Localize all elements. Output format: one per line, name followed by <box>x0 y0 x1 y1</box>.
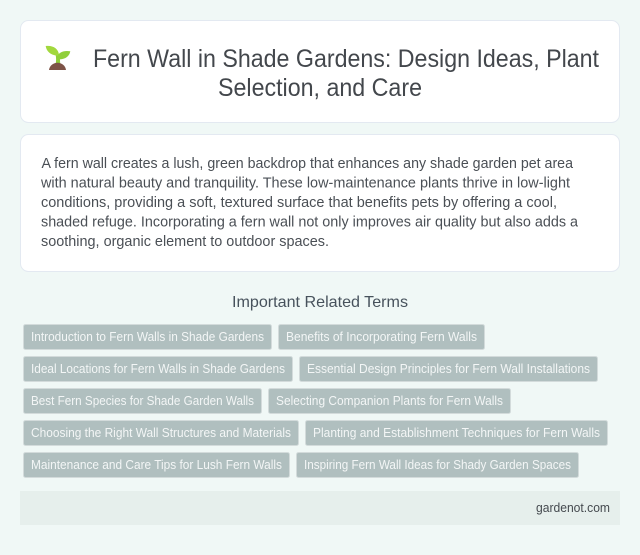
tag: ideal locations <box>24 356 292 382</box>
tag: ideal locations: Ideal Locations for Fern Walls in Shade Gardens <box>31 361 285 376</box>
panel: description <box>20 134 620 272</box>
text block: description paragraph: with natural beauty and tranquility. These low-maintenance plants thrive in low-light <box>40 174 571 192</box>
tag: best species <box>24 388 262 414</box>
text block: description paragraph: shaded refuge. Incorporating a fern wall not only improves air quality but also adds a <box>41 214 579 230</box>
tag: companion plants <box>268 388 510 414</box>
heading: related terms: Important Related Terms <box>232 294 408 311</box>
tag: inspiring ideas <box>296 452 578 478</box>
tag: benefits: Benefits of Incorporating Fern Walls <box>286 329 477 344</box>
title: Selection, and Care <box>218 74 422 102</box>
icon: seedling <box>46 46 70 70</box>
text block: description paragraph: conditions, providing a soft, textured surface that benefits pets by offering a cool, <box>41 194 557 211</box>
tag: maintenance: Maintenance and Care Tips for Lush Fern Walls <box>31 457 282 472</box>
tag: wall structures <box>24 420 298 446</box>
tag: companion plants: Selecting Companion Plants for Fern Walls <box>276 393 503 408</box>
tag list <box>24 324 608 478</box>
panel: title card <box>20 20 620 122</box>
tag: design principles: Essential Design Principles for Fern Wall Installations <box>307 361 590 376</box>
tag: design principles <box>300 356 598 382</box>
tag: introduction: Introduction to Fern Walls in Shade Gardens <box>31 329 264 344</box>
tag: introduction <box>24 324 272 350</box>
tag: planting techniques: Planting and Establishment Techniques for Fern Walls <box>313 425 600 440</box>
tag: inspiring ideas: Inspiring Fern Wall Ideas for Shady Garden Spaces <box>304 457 571 472</box>
footer <box>20 491 620 525</box>
text block: description paragraph: A fern wall creates a lush, green backdrop that enhances any shade garden pet area <box>42 155 574 172</box>
tag: wall structures: Choosing the Right Wall Structures and Materials <box>31 425 291 440</box>
text block: description paragraph: soothing, organic element to outdoor spaces. <box>41 233 329 250</box>
title: Fern Wall in Shade Gardens: Design Ideas, Plant <box>93 45 599 73</box>
tag: best species: Best Fern Species for Shade Garden Walls <box>31 393 254 408</box>
title <box>93 45 599 102</box>
tag: planting techniques <box>306 420 608 446</box>
tag: benefits <box>278 324 484 350</box>
tag: maintenance <box>24 452 290 478</box>
footer: site name: gardenot.com <box>536 500 610 515</box>
text block: description paragraph <box>40 155 579 250</box>
